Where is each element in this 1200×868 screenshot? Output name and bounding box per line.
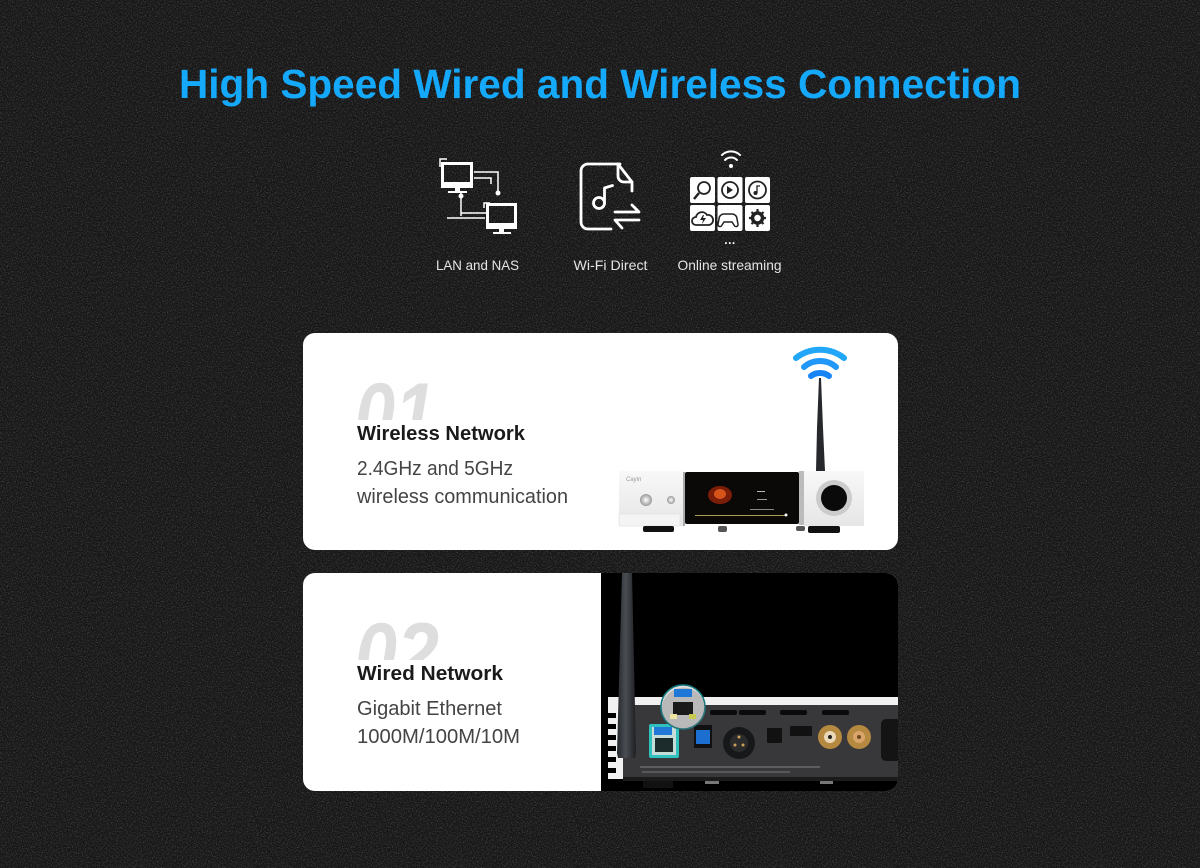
heading: Wired Network: Wired Network — [357, 663, 504, 685]
icon: LAN and NAS — [440, 159, 517, 234]
device: streamer with antenna: Cayin — [626, 477, 642, 483]
description: wireless: wireless communication — [356, 486, 568, 508]
description: wireless: 2.4GHz and 5GHz — [357, 458, 513, 480]
number 02: 02 — [355, 606, 439, 702]
label: LAN and NAS: LAN and NAS — [436, 257, 519, 273]
label: Online streaming: Online streaming — [678, 257, 782, 273]
icon: online streaming — [690, 151, 770, 247]
number 01: 01 — [355, 366, 435, 462]
device: streamer with antenna — [619, 378, 864, 533]
icon: online streaming: ... — [724, 233, 736, 247]
photo: rear panel ports — [601, 573, 901, 791]
icon: Wi-Fi Direct — [581, 164, 639, 229]
description: wired — [357, 698, 520, 748]
description: wired: 1000M/100M/10M — [357, 726, 520, 748]
panel: wireless network — [303, 333, 898, 550]
heading: Wireless Network: Wireless Network — [357, 423, 526, 445]
panel: wired network — [303, 573, 901, 791]
description: wired: Gigabit Ethernet — [357, 698, 502, 720]
label: Wi-Fi Direct: Wi-Fi Direct — [574, 257, 648, 273]
description: wireless — [356, 458, 568, 508]
title: High Speed Wired and Wireless Connection — [179, 61, 1021, 107]
icon: wifi signal — [796, 350, 844, 376]
